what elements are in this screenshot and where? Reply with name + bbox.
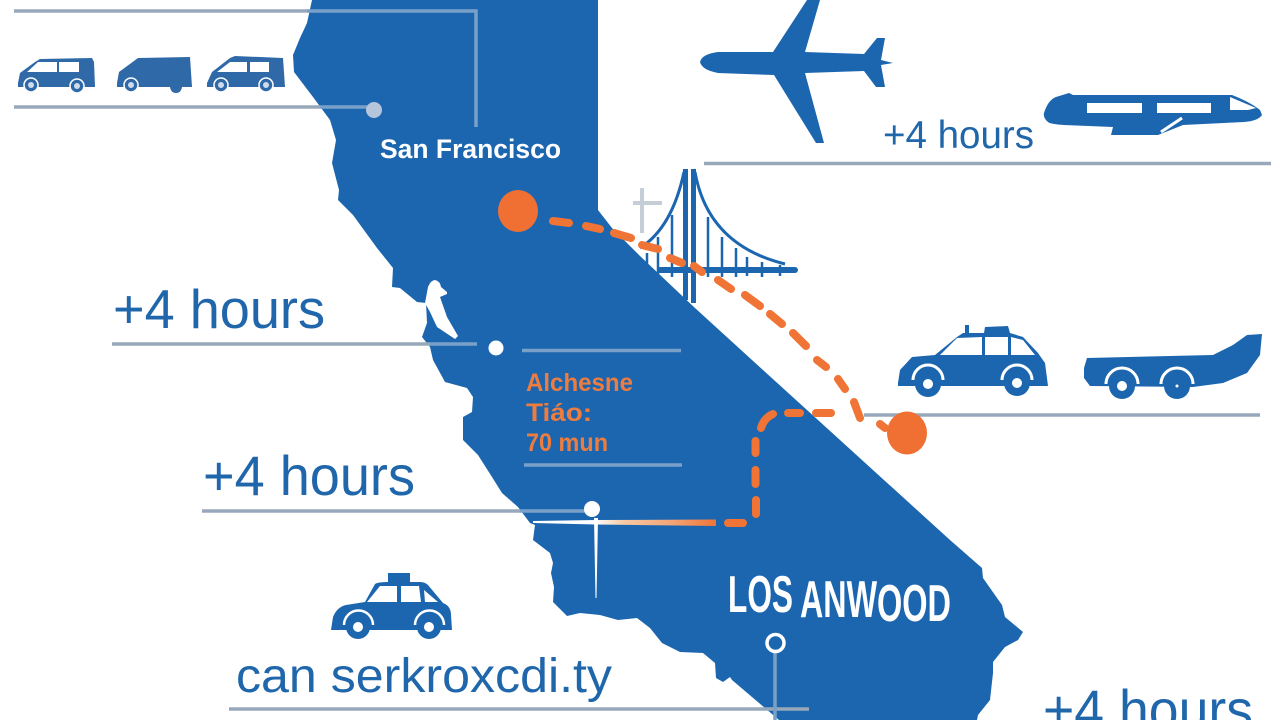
caption: lower left: can serkroxcdi.ty (236, 650, 612, 703)
heading: +4 hours middle: +4 hours (203, 444, 415, 507)
heading: +4 hours top right: +4 hours (883, 114, 1034, 157)
route: northern dashed segment (553, 221, 885, 428)
label: Los Anwood (728, 566, 951, 633)
node dots (366, 102, 784, 652)
label: Los Anwood: OOD (877, 575, 951, 633)
icon: train plane (1044, 93, 1262, 135)
van 1 (18, 58, 95, 93)
gray cross marker (633, 188, 662, 233)
map: California (293, 0, 1023, 720)
marker: San Francisco (498, 190, 538, 232)
van 3 (207, 56, 285, 92)
icons: three vans (18, 56, 285, 93)
orange info text: 70 mun (526, 429, 608, 457)
orange info text: Alchesne (526, 369, 633, 397)
orange info text: Tiáo: (526, 399, 592, 427)
white figure on coast (425, 280, 458, 339)
heading: +4 hours left: +4 hours (113, 278, 325, 340)
route: southern dashed segment (728, 413, 831, 523)
label: San Francisco: San Francisco (380, 134, 561, 164)
icon: airplane (700, 0, 893, 143)
marker: destination (887, 412, 927, 454)
icon: long vehicle right (1084, 334, 1262, 399)
bridge icon (640, 169, 795, 303)
orange info text (526, 369, 633, 457)
label: Los Anwood: LOS (728, 566, 793, 624)
van 2 (117, 57, 192, 93)
label: Los Anwood: ANW (800, 571, 878, 629)
white tapered pin (594, 518, 598, 598)
icon: car right (898, 325, 1048, 397)
icon: car lower left (331, 573, 452, 639)
route: faded line into white (533, 520, 716, 526)
